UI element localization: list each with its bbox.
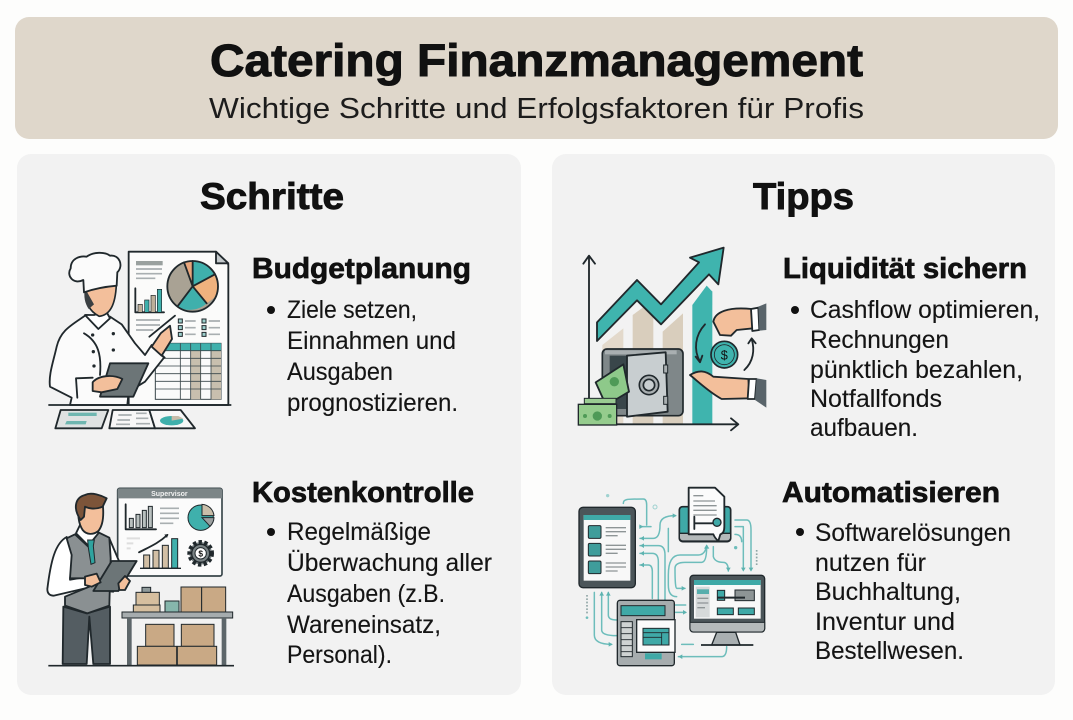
tip text: Liquidität sichern xyxy=(791,296,1040,442)
tip heading: Automatisieren: Automatisieren xyxy=(782,477,1000,509)
icon: supervisor with dashboard and boxes: Supervisor xyxy=(151,491,188,498)
tip heading: Liquidität sichern: Liquidität sichern xyxy=(783,253,1027,285)
title: Catering Finanzmanagement xyxy=(210,35,863,86)
money xyxy=(596,364,629,400)
tip text: Liquidität sichern: Notfallfonds xyxy=(810,385,942,413)
icon: safe, growth arrow and hands: $ xyxy=(721,348,728,362)
step text: Kostenkontrolle: Überwachung aller xyxy=(287,549,492,577)
icon: connected devices xyxy=(579,488,765,666)
heading: Schritte: Schritte xyxy=(200,176,344,217)
tip text: Automatisieren: Softwarelösungen xyxy=(815,519,1011,547)
step heading: Budgetplanung: Budgetplanung xyxy=(252,253,471,285)
step text: Kostenkontrolle: Ausgaben (z.B. xyxy=(287,580,445,608)
chef body xyxy=(50,315,164,405)
desktop monitor xyxy=(690,575,765,645)
tip text: Liquidität sichern: Cashflow optimieren, xyxy=(810,296,1040,324)
step text: Budgetplanung: Ziele setzen, xyxy=(287,296,417,324)
step text: Kostenkontrolle: Wareneinsatz, xyxy=(287,611,441,639)
step text: Budgetplanung xyxy=(267,296,458,417)
tip text: Automatisieren xyxy=(796,519,1011,665)
boxes and table xyxy=(181,587,202,612)
subtitle: Wichtige Schritte und Erfolgsfaktoren für Profis xyxy=(209,93,864,125)
pie chart xyxy=(167,261,218,312)
heading: Tipps: Tipps xyxy=(753,176,854,217)
tip text: Automatisieren: Buchhaltung, xyxy=(815,578,961,606)
coin xyxy=(711,341,738,368)
step text: Budgetplanung: Einnahmen und xyxy=(287,327,456,355)
icon: safe, growth arrow and hands xyxy=(578,248,766,430)
spreadsheet xyxy=(155,343,221,399)
step text: Kostenkontrolle: Personal). xyxy=(287,641,392,669)
tip text: Automatisieren: Inventur und xyxy=(815,608,955,636)
tip text: Automatisieren: Bestellwesen. xyxy=(815,637,964,665)
step text: Kostenkontrolle: Regelmäßige xyxy=(287,518,431,546)
icon: supervisor with dashboard and boxes: $ xyxy=(198,548,203,558)
safe xyxy=(602,349,683,416)
icon: supervisor with dashboard and boxes xyxy=(47,488,234,666)
tip text: Liquidität sichern: aufbauen. xyxy=(810,414,918,442)
upper hand xyxy=(713,308,753,336)
browser windows xyxy=(617,600,675,666)
person xyxy=(97,538,120,592)
growth arrow xyxy=(597,248,724,341)
panel: Tipps xyxy=(552,154,1055,695)
step text: Kostenkontrolle xyxy=(267,518,492,669)
document on printer xyxy=(679,488,731,542)
tip text: Liquidität sichern: Rechnungen xyxy=(810,326,949,354)
header banner xyxy=(15,17,1058,139)
step heading: Kostenkontrolle: Kostenkontrolle xyxy=(252,477,474,509)
tip text: Automatisieren: nutzen für xyxy=(815,549,926,577)
lower hand xyxy=(690,371,750,399)
step text: Budgetplanung: Ausgaben xyxy=(287,358,393,386)
tip text: Liquidität sichern: pünktlich bezahlen, xyxy=(810,356,1023,384)
panel: Schritte xyxy=(17,154,521,695)
tablet xyxy=(579,507,635,588)
step text: Budgetplanung: prognostizieren. xyxy=(287,389,458,417)
icon: chef with budget report xyxy=(48,252,231,428)
connector lines xyxy=(586,494,757,659)
